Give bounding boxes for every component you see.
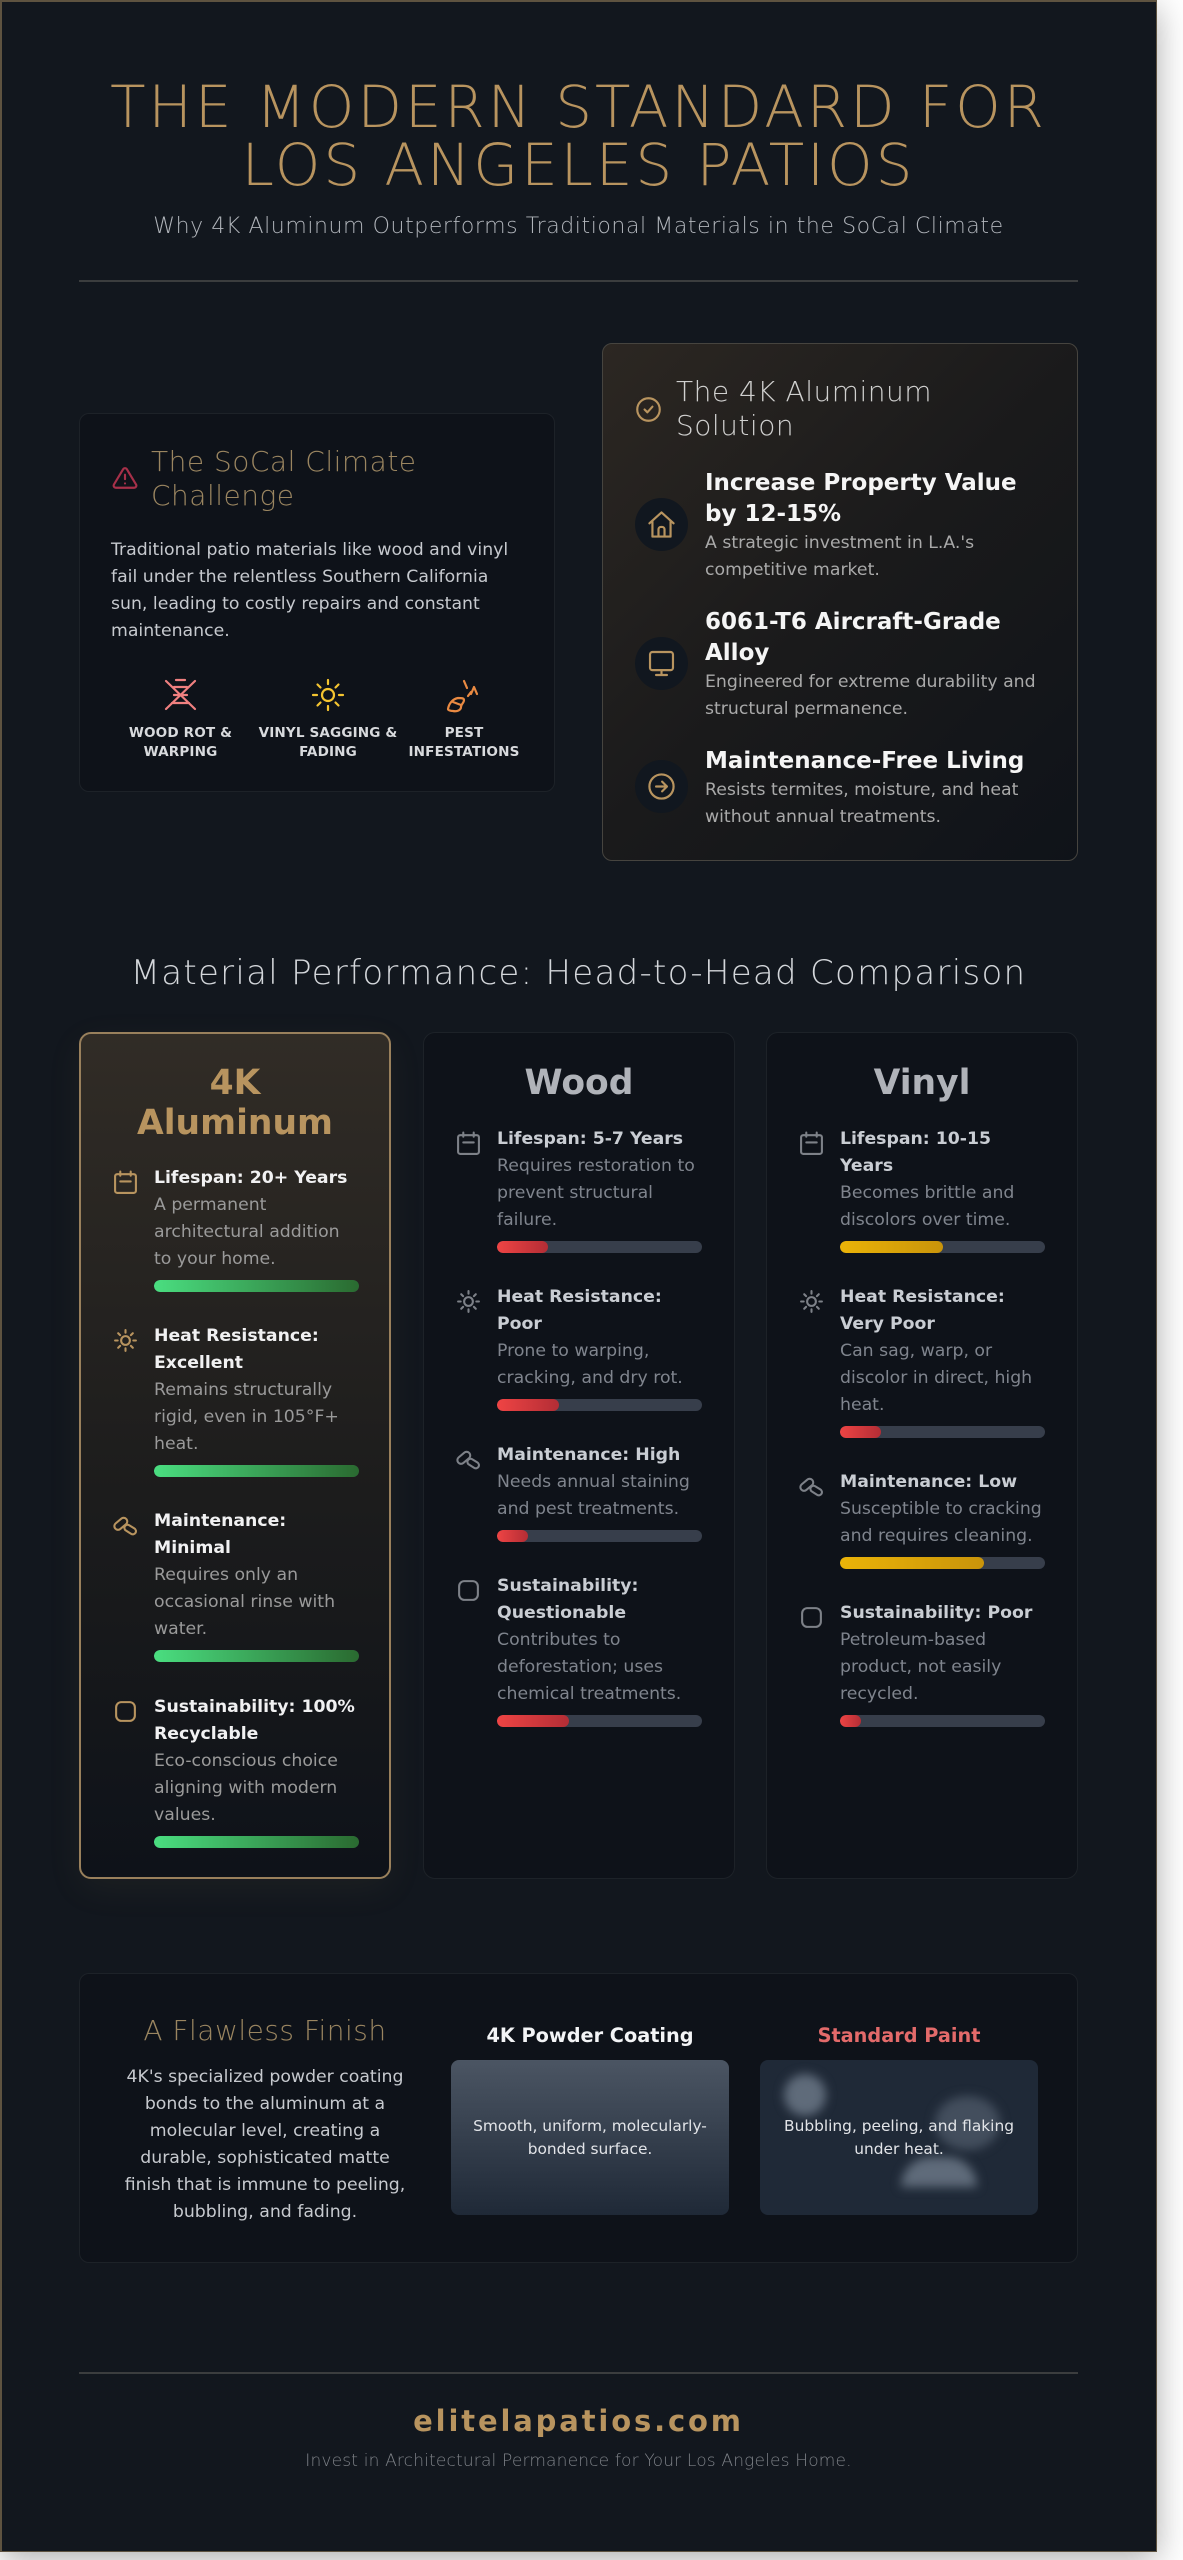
- label: powder coating: 4K Powder Coating: [486, 2024, 694, 2047]
- text: flawless finish: bubbling, and fading.: [173, 2202, 357, 2222]
- metric: sustainability: Eco-conscious choice: [154, 1751, 338, 1771]
- panel: aluminum solution: [602, 343, 1078, 861]
- panel: wood: [423, 1032, 735, 1879]
- swatch text: bonded surface.: [528, 2140, 652, 2158]
- metric: sustainability: product, not easily: [840, 1657, 1001, 1677]
- heading: comparison: Material Performance: Head-to-Head Comparison: [131, 953, 1026, 993]
- panel: flawless finish: [79, 1973, 1078, 2263]
- metric: sustainability: values.: [154, 1805, 216, 1825]
- metric: lifespan: Lifespan: 10-15: [840, 1129, 991, 1149]
- metric: lifespan: architectural addition: [154, 1222, 340, 1242]
- benefit: property value: A strategic investment in L.A.'s: [705, 533, 974, 553]
- metric: heat resistance: Excellent: [154, 1353, 243, 1373]
- benefit: maintenance free: Maintenance-Free Living: [705, 748, 1024, 774]
- swatch text: [473, 2117, 707, 2158]
- metric: lifespan: failure.: [497, 1210, 557, 1230]
- label: standard paint: Standard Paint: [818, 2024, 980, 2047]
- metric: maintenance: and pest treatments.: [497, 1499, 679, 1519]
- icon: house: [635, 498, 688, 551]
- heading: flawless finish: A Flawless Finish: [143, 2014, 387, 2047]
- benefit: property value: [705, 470, 1017, 580]
- metric: maintenance: Susceptible to cracking: [840, 1499, 1042, 1519]
- icon: monitor: [635, 637, 688, 690]
- metric: heat resistance: Very Poor: [840, 1314, 935, 1334]
- label: vinyl sagging: VINYL SAGGING &: [259, 725, 397, 741]
- metric: sustainability: Sustainability:: [497, 1576, 638, 1596]
- metric: sustainability: Sustainability: Poor: [840, 1603, 1032, 1623]
- metric: maintenance: Requires only an: [154, 1565, 298, 1585]
- benefit: maintenance free: Resists termites, moisture, and heat: [705, 780, 1018, 800]
- metric: sustainability: Questionable: [497, 1603, 626, 1623]
- metric: lifespan: Lifespan: 20+ Years: [154, 1168, 347, 1188]
- metric: maintenance: and requires cleaning.: [840, 1526, 1033, 1546]
- metric: heat resistance: heat.: [154, 1434, 198, 1454]
- metric: lifespan: Years: [840, 1156, 893, 1176]
- metric: heat resistance: heat.: [840, 1395, 884, 1415]
- heading: climate challenge: The SoCal Climate: [151, 444, 417, 478]
- metric: maintenance: water.: [154, 1619, 207, 1639]
- heading: 4K aluminum: [137, 1063, 333, 1143]
- panel: climate challenge: [79, 413, 555, 792]
- metric: heat resistance: rigid, even in 105°F+: [154, 1407, 339, 1427]
- metric: sustainability: Contributes to: [497, 1630, 620, 1650]
- benefit: maintenance free: without annual treatments.: [705, 806, 941, 826]
- swatch: powder coating: [451, 2060, 729, 2215]
- metric: heat resistance: Can sag, warp, or: [840, 1341, 992, 1361]
- heading: climate challenge: Challenge: [151, 478, 295, 512]
- title: [110, 73, 1047, 199]
- metric: lifespan: discolors over time.: [840, 1210, 1010, 1230]
- icon: wood rot: [164, 678, 196, 710]
- heading: aluminum solution: [676, 375, 932, 442]
- text: flawless finish: bonds to the aluminum at a: [145, 2094, 385, 2114]
- metric: heat resistance: Prone to warping,: [497, 1341, 649, 1361]
- icon: arrow circle: [635, 760, 688, 813]
- footer tagline: Invest in Architectural Permanence for Your Los Angeles Home.: [305, 2451, 852, 2471]
- icon: check circle: [636, 397, 661, 422]
- metric: sustainability: Petroleum-based: [840, 1630, 986, 1650]
- metric: lifespan: Requires restoration to: [497, 1156, 695, 1176]
- metric: heat resistance: Heat Resistance:: [154, 1326, 319, 1346]
- label: pest infestations: PEST: [445, 725, 483, 741]
- metric: sustainability: chemical treatments.: [497, 1684, 681, 1704]
- metric: heat resistance: [114, 1326, 359, 1477]
- swatch text: [784, 2117, 1014, 2158]
- text: climate challenge: Traditional patio materials like wood and vinyl: [111, 540, 508, 560]
- metric: sustainability: [801, 1603, 1045, 1727]
- heading: vinyl: Vinyl: [874, 1063, 970, 1103]
- heading: aluminum solution: Solution: [676, 409, 794, 442]
- benefit: aircraft grade alloy: Engineered for extreme durability and: [705, 672, 1036, 692]
- label: vinyl sagging: FADING: [299, 744, 357, 760]
- icon: pest: [446, 680, 478, 712]
- metric: heat resistance: [457, 1287, 702, 1411]
- metric: maintenance: Maintenance: High: [497, 1445, 680, 1465]
- text: climate challenge: sun, leading to costly repairs and constant: [111, 594, 480, 614]
- metric: sustainability: recycled.: [840, 1684, 918, 1704]
- metric: maintenance: [799, 1472, 1045, 1569]
- metric: heat resistance: Heat Resistance:: [840, 1287, 1005, 1307]
- metric: lifespan: Lifespan: 5-7 Years: [497, 1129, 683, 1149]
- heading: wood: Wood: [525, 1063, 633, 1103]
- panel: 4K aluminum: [79, 1032, 391, 1879]
- icon: warning triangle: [112, 467, 138, 489]
- text: flawless finish: 4K's specialized powder coating: [127, 2067, 403, 2087]
- metric: maintenance: [456, 1445, 702, 1542]
- metric: heat resistance: cracking, and dry rot.: [497, 1368, 683, 1388]
- metric: heat resistance: Remains structurally: [154, 1380, 332, 1400]
- metric: sustainability: Sustainability: 100%: [154, 1697, 355, 1717]
- metric: sustainability: Recyclable: [154, 1724, 258, 1744]
- metric: maintenance: [113, 1511, 359, 1662]
- metric: lifespan: [114, 1168, 359, 1292]
- text: flawless finish: durable, sophisticated matte: [140, 2148, 390, 2168]
- text: climate challenge: [110, 540, 508, 640]
- metric: heat resistance: Poor: [497, 1314, 542, 1334]
- metric: lifespan: A permanent: [154, 1195, 266, 1215]
- benefit: property value: Increase Property Value: [705, 470, 1017, 496]
- metric: lifespan: Becomes brittle and: [840, 1183, 1014, 1203]
- swatch text: Smooth, uniform, molecularly-: [473, 2117, 707, 2135]
- swatch text: under heat.: [854, 2140, 944, 2158]
- metric: heat resistance: discolor in direct, high: [840, 1368, 1032, 1388]
- text: climate challenge: fail under the relentless Southern California: [111, 566, 488, 586]
- metric: maintenance: Maintenance:: [154, 1511, 286, 1531]
- metric: maintenance: Minimal: [154, 1538, 231, 1558]
- metric: lifespan: prevent structural: [497, 1183, 653, 1203]
- metric: heat resistance: [800, 1287, 1045, 1438]
- swatch text: Bubbling, peeling, and flaking: [784, 2117, 1014, 2135]
- title: THE MODERN STANDARD FOR: [110, 73, 1047, 141]
- metric: maintenance: Maintenance: Low: [840, 1472, 1017, 1492]
- benefit: aircraft grade alloy: 6061-T6 Aircraft-Grade: [705, 609, 1001, 635]
- benefit: property value: by 12-15%: [705, 501, 841, 527]
- heading: aluminum solution: The 4K Aluminum: [676, 375, 932, 408]
- benefit: aircraft grade alloy: structural permanence.: [705, 699, 908, 719]
- label: wood rot: [129, 725, 232, 760]
- metric: maintenance: Needs annual staining: [497, 1472, 690, 1492]
- subtitle: Why 4K Aluminum Outperforms Traditional Materials in the SoCal Climate: [153, 214, 1004, 239]
- label: vinyl sagging: [258, 725, 397, 760]
- icon: sun damage: [312, 678, 344, 712]
- text: flawless finish: finish that is immune to peeling,: [125, 2175, 405, 2195]
- text: climate challenge: maintenance.: [111, 620, 230, 640]
- metric: lifespan: to your home.: [154, 1249, 276, 1269]
- text: flawless finish: molecular level, creating a: [150, 2121, 380, 2141]
- label: wood rot: WOOD ROT &: [129, 725, 232, 741]
- bubble: [784, 2074, 826, 2116]
- label: pest infestations: [409, 725, 519, 760]
- metric: lifespan: [457, 1129, 702, 1253]
- bubble: [935, 2096, 1000, 2150]
- metric: sustainability: [458, 1576, 702, 1727]
- metric: sustainability: deforestation; uses: [497, 1657, 663, 1677]
- title: LOS ANGELES PATIOS: [242, 131, 915, 199]
- peeling patch: [901, 2157, 977, 2187]
- heading: climate challenge: [151, 444, 417, 512]
- metric: lifespan: [800, 1129, 1045, 1253]
- benefit: property value: competitive market.: [705, 560, 880, 580]
- heading: 4K aluminum: Aluminum: [137, 1103, 333, 1143]
- footer domain: elitelapatios.com: [413, 2404, 744, 2438]
- swatch: standard paint: [760, 2060, 1038, 2215]
- label: wood rot: WARPING: [144, 744, 217, 760]
- metric: heat resistance: Heat Resistance:: [497, 1287, 662, 1307]
- benefit: aircraft grade alloy: [705, 609, 1036, 719]
- benefit: aircraft grade alloy: Alloy: [705, 640, 769, 666]
- text: flawless finish: [125, 2067, 405, 2222]
- metric: sustainability: aligning with modern: [154, 1778, 337, 1798]
- heading: 4K aluminum: 4K: [210, 1063, 260, 1103]
- metric: sustainability: [115, 1697, 359, 1848]
- panel: vinyl: [766, 1032, 1078, 1879]
- benefit: maintenance free: [705, 748, 1024, 826]
- label: pest infestations: INFESTATIONS: [409, 744, 519, 760]
- metric: maintenance: occasional rinse with: [154, 1592, 335, 1612]
